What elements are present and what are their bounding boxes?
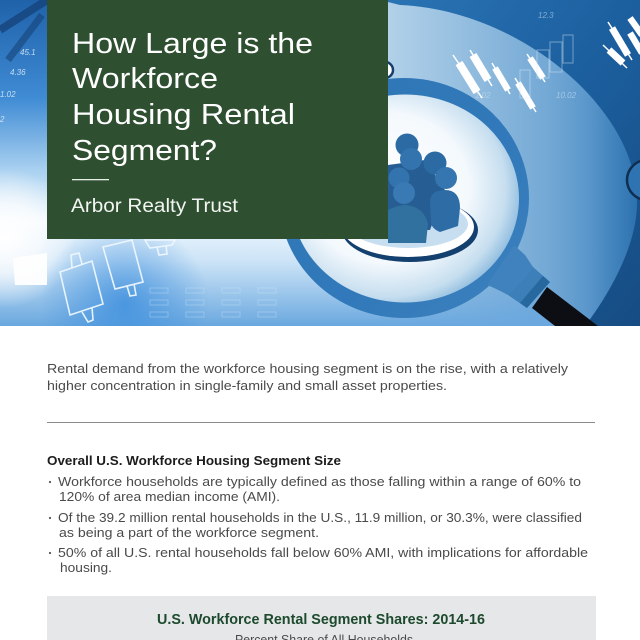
bullet 2 bbox=[49, 510, 582, 540]
chart candles: lower left bbox=[13, 240, 175, 322]
chart title: U.S. Workforce Rental Segment Shares: 2014-16 bbox=[157, 611, 485, 628]
title: Segment? bbox=[72, 135, 217, 167]
title: Housing Rental bbox=[72, 99, 295, 131]
handle bbox=[532, 287, 598, 326]
bullet 3: housing. bbox=[60, 560, 112, 575]
author: Arbor Realty Trust bbox=[71, 196, 239, 217]
title bbox=[72, 28, 313, 167]
chart candles: upper right bbox=[453, 18, 640, 112]
bullet 1: 120% of area median income (AMI). bbox=[59, 489, 280, 504]
chart figures on the background: 10.02 bbox=[556, 91, 577, 100]
ring at the right edge bbox=[627, 160, 640, 200]
bullet 2: as being a part of the workforce segment. bbox=[59, 525, 319, 540]
chart figures on the background bbox=[0, 11, 577, 124]
bullet 3 bbox=[49, 545, 588, 575]
collar bbox=[508, 267, 550, 308]
bullet 1: Workforce households are typically defined as those falling within a range of 60% to bbox=[58, 474, 581, 489]
platform under people bbox=[344, 208, 478, 262]
bullet 1 bbox=[49, 474, 581, 504]
group of people bbox=[388, 134, 460, 243]
title divider bbox=[72, 179, 109, 180]
chart figures on the background: 12.3 bbox=[538, 11, 554, 20]
bullet list bbox=[49, 474, 588, 575]
chart figures on the background: 1.02 bbox=[0, 90, 16, 99]
magnifying glass bbox=[279, 78, 598, 326]
chart figures on the background: 4.36 bbox=[10, 68, 26, 77]
bullet 3: 50% of all U.S. rental households fall below 60% AMI, with implications for affordable bbox=[58, 545, 588, 560]
chart panel: workforce rental segment shares bbox=[47, 596, 596, 640]
hero image: magnifying glass over stock chart bbox=[0, 0, 640, 326]
chart figures on the background: 2 bbox=[0, 115, 5, 124]
title: How Large is the bbox=[72, 28, 313, 60]
intro paragraph bbox=[47, 361, 569, 393]
intro paragraph: Rental demand from the workforce housing segment is on the rise, with a relatively bbox=[47, 361, 569, 376]
title panel bbox=[47, 0, 388, 239]
section heading: Overall U.S. Workforce Housing Segment Size bbox=[47, 453, 341, 468]
intro paragraph: higher concentration in single-family and small asset properties. bbox=[47, 378, 447, 393]
bullet 2: Of the 39.2 million rental households in the U.S., 11.9 million, or 30.3%, were classified bbox=[58, 510, 582, 525]
faint table of figures bbox=[150, 288, 276, 317]
lens glass bbox=[291, 94, 519, 302]
chart figures on the background: 45.1 bbox=[20, 48, 36, 57]
lens rim bbox=[279, 78, 533, 318]
small ring behind lens bbox=[388, 61, 394, 79]
chart figures on the background: 1.02 bbox=[475, 91, 491, 100]
title: Workforce bbox=[72, 63, 218, 95]
